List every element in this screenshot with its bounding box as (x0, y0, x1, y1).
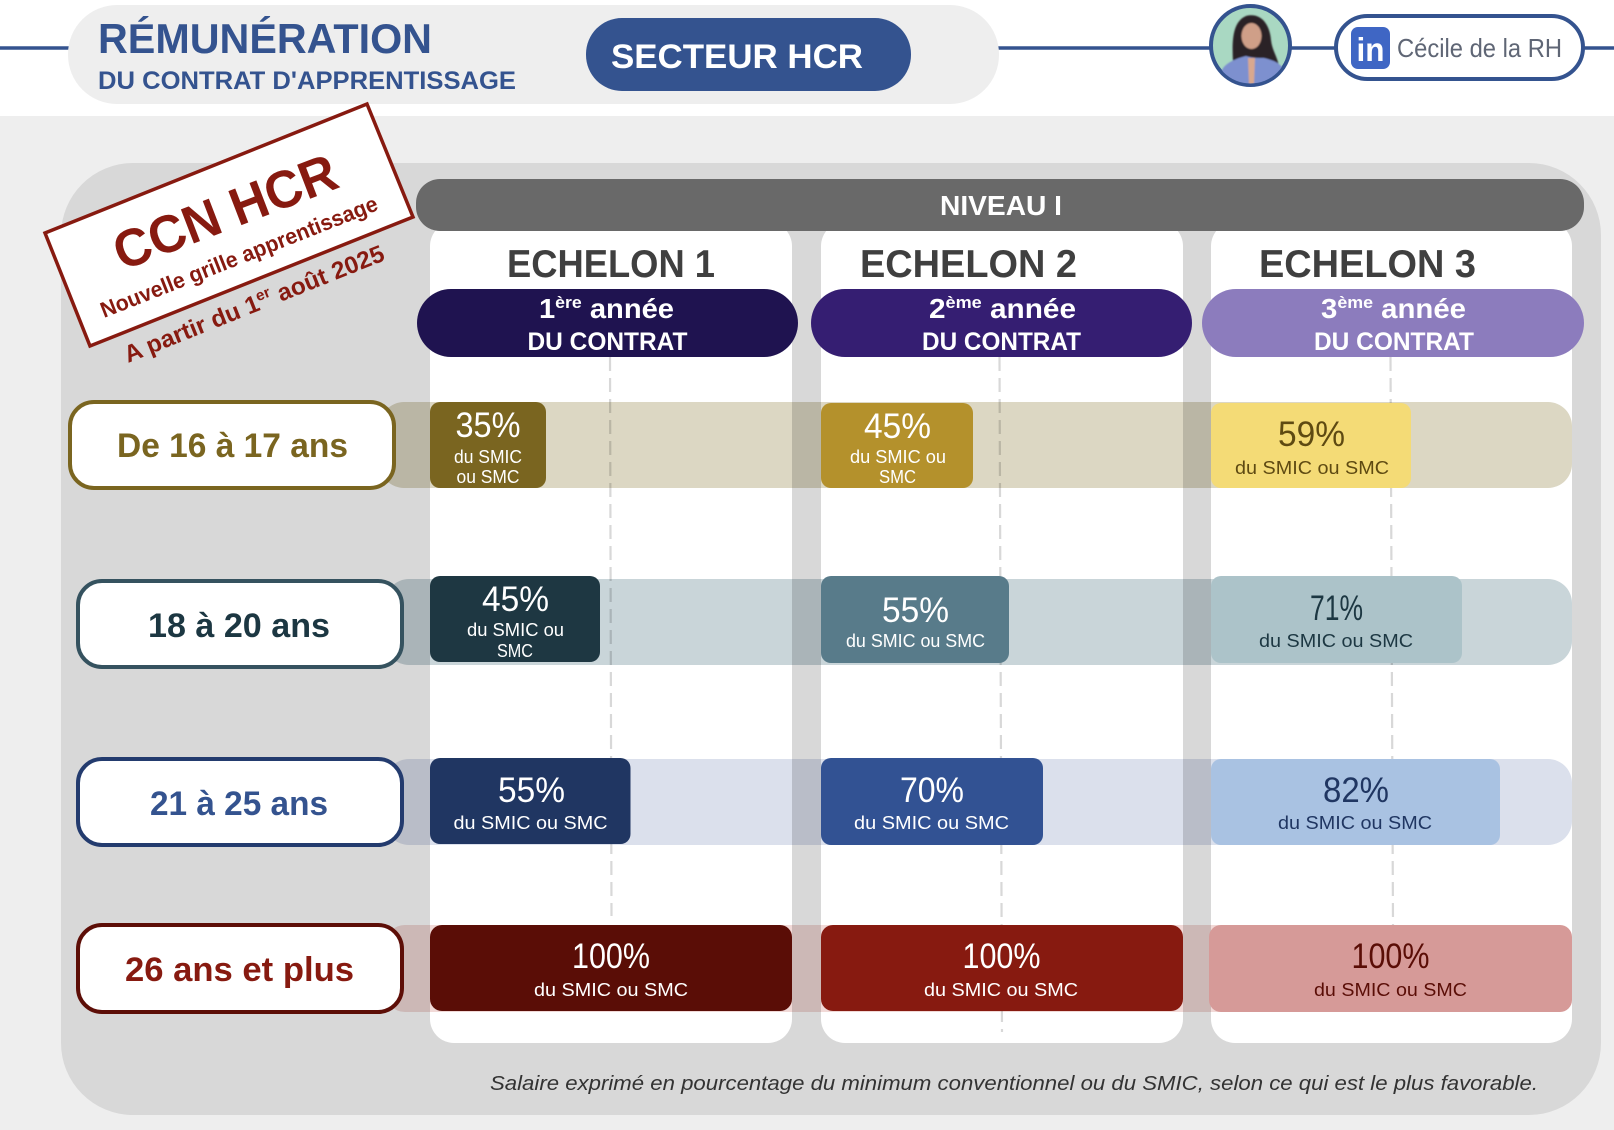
row: 18-20 ans (78, 576, 1572, 667)
bar: 100% echelon 3: du SMIC ou SMC (1314, 980, 1467, 1000)
bar: 70% (821, 758, 1043, 845)
title: RÉMUNÉRATION (98, 15, 432, 62)
bar: 59%: du SMIC ou SMC (1235, 458, 1389, 478)
bar: 100% echelon 3: 100% (1352, 937, 1430, 976)
bar: 100% echelon 2: du SMIC ou SMC (924, 980, 1078, 1000)
column: echelon 3 (1211, 222, 1572, 1043)
year pill 1 (417, 289, 798, 357)
bar: 71%: du SMIC ou SMC (1259, 631, 1413, 651)
bar: 55% (430, 758, 630, 844)
bar: 71% (1211, 576, 1462, 663)
year pill 3: année (1373, 293, 1466, 324)
bar: 100% echelon 2 (821, 925, 1183, 1011)
bar: 59% (1211, 403, 1411, 488)
bar: 70%: du SMIC ou SMC (854, 813, 1009, 833)
year pill 3: 3 (1321, 293, 1337, 324)
bar: 100% echelon 1: du SMIC ou SMC (534, 980, 688, 1000)
bar: 45%: 45% (864, 407, 931, 446)
bar: 55% (821, 576, 1009, 663)
bar: 59%: 59% (1278, 415, 1345, 454)
stamp: CCN HCR: A partir du 1 (120, 291, 261, 369)
year pill 1: ère (555, 293, 582, 312)
icon: LinkedIn: in (1356, 31, 1384, 68)
label: 26 ans et plus: 26 ans et plus (125, 951, 354, 989)
bar: 82%: du SMIC ou SMC (1278, 813, 1432, 833)
bar: 100% echelon 2: 100% (962, 937, 1040, 976)
bar: 55%: 55% (882, 591, 949, 630)
year pill 1: 1 (539, 293, 555, 324)
stamp: CCN HCR (45, 104, 413, 369)
LinkedIn badge (1336, 16, 1583, 79)
year pill 2 (811, 289, 1192, 357)
year pill 2: 2 (929, 293, 945, 324)
year pill 2: année (982, 293, 1076, 324)
bar: 45%: 45% (482, 580, 549, 619)
bar: 45% (821, 403, 973, 488)
sector badge (586, 18, 911, 91)
label: 26 ans et plus (78, 925, 402, 1012)
label: 21 à 25 ans (78, 759, 402, 845)
bar: 45%: SMC (497, 641, 533, 661)
bar: 82% (1211, 759, 1500, 845)
level header bar: NIVEAU I (940, 190, 1062, 221)
bar: 45%: du SMIC ou (850, 447, 946, 467)
icon: LinkedIn (1351, 27, 1390, 69)
stamp: CCN HCR: er (253, 284, 273, 305)
bar: 45% (430, 576, 600, 662)
bar: 45%: SMC (879, 467, 916, 487)
row: 16-17 ans (70, 402, 1572, 488)
bar: 100% echelon 3 (1209, 925, 1572, 1012)
year pill 3: DU CONTRAT (1314, 328, 1474, 356)
stamp: CCN HCR: CCN HCR (105, 143, 346, 282)
bar: 35%: du SMIC (454, 447, 522, 467)
label: 18 à 20 ans (78, 581, 402, 667)
label: De 16 à 17 ans: De 16 à 17 ans (117, 427, 348, 465)
label: 18 à 20 ans: 18 à 20 ans (148, 607, 330, 645)
bar: 55%: 55% (498, 771, 565, 810)
level header bar (416, 179, 1584, 231)
column: echelon 1 (430, 222, 792, 1043)
bar: 100% echelon 1 (430, 925, 792, 1011)
bar: 35%: 35% (456, 406, 520, 445)
author portrait (1211, 6, 1290, 90)
sector badge: SECTEUR HCR (611, 38, 863, 76)
subtitle: DU CONTRAT D'APPRENTISSAGE (98, 67, 516, 95)
author name: Cécile de la RH (1397, 33, 1562, 63)
stamp: CCN HCR: août 2025 (267, 240, 388, 310)
bar: 82%: 82% (1323, 771, 1389, 810)
stamp: CCN HCR: Nouvelle grille apprentissage (97, 191, 381, 323)
column: echelon 1: ECHELON 1 (507, 243, 715, 286)
year pill 3: ème (1337, 293, 1373, 312)
bar: 100% echelon 1: 100% (572, 937, 650, 976)
bar: 35% (430, 402, 546, 488)
bar: 45%: du SMIC ou (467, 620, 564, 640)
bar: 35%: ou SMC (456, 467, 520, 487)
bar: 55%: du SMIC ou SMC (846, 631, 985, 651)
year pill 1: année (582, 293, 674, 324)
year pill 2: ème (946, 293, 982, 312)
column: echelon 2: ECHELON 2 (860, 243, 1077, 286)
label: De 16 à 17 ans (70, 402, 394, 488)
column: echelon 3: ECHELON 3 (1259, 243, 1476, 286)
year pill 1: DU CONTRAT (528, 328, 688, 356)
year pill 2: DU CONTRAT (922, 328, 1081, 356)
bar: 70%: 70% (900, 771, 964, 810)
header banner (68, 5, 999, 104)
label: 21 à 25 ans: 21 à 25 ans (150, 785, 328, 823)
bar: 55%: du SMIC ou SMC (454, 813, 608, 833)
row: 21-25 ans (78, 758, 1572, 845)
row: 26 ans et plus (78, 925, 1572, 1012)
column: echelon 2 (821, 222, 1183, 1043)
year pill 3 (1202, 289, 1584, 357)
bar: 71%: 71% (1310, 589, 1363, 628)
footnote: Salaire exprimé en pourcentage du minimum conventionnel ou du SMIC, selon ce qui est le plus favorable. (490, 1073, 1538, 1095)
